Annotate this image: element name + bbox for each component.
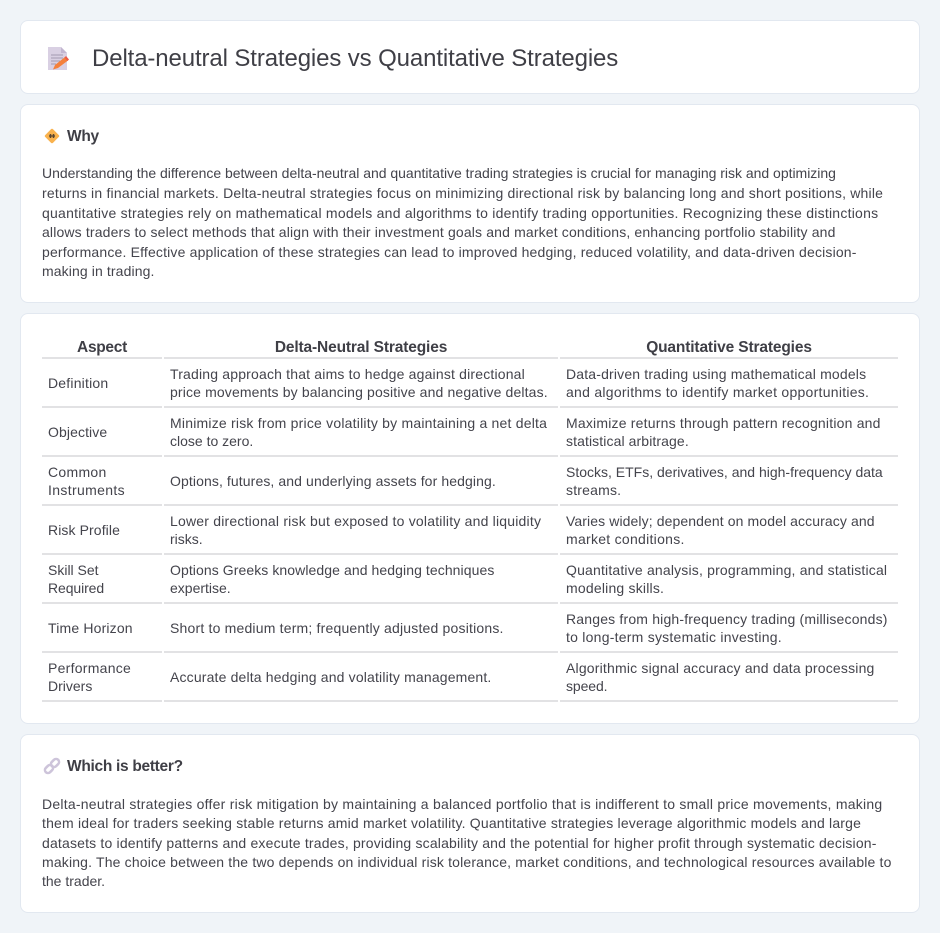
why paragraph: returns in financial markets. Delta-neutral strategies focus on minimizing directional risk by balancing long and short positions, while [42,185,883,201]
table header: Quantitative Strategies [646,339,812,356]
row: skill set required: expertise. [170,580,231,596]
row: objective: close to zero. [170,433,253,449]
row: performance drivers: Algorithmic signal accuracy and data processing [566,660,875,676]
row: risk profile: market conditions. [566,531,685,547]
row: objective [48,415,881,449]
row: common instruments: Stocks, ETFs, derivatives, and high-frequency data [566,464,883,480]
heading: why: Why [67,128,99,145]
row: definition: price movements by balancing positive and negative deltas. [170,384,548,400]
conclusion paragraph: datasets to identify patterns and execute trades, providing scalability and the potential for higher profit through systematic decision- [42,835,877,851]
row: common instruments: Options, futures, and underlying assets for hedging. [170,473,496,489]
row: risk profile: Varies widely; dependent on model accuracy and [566,513,875,529]
row: time horizon [48,611,888,645]
row: risk profile: Lower directional risk but exposed to volatility and liquidity [170,513,541,529]
row: objective: Objective [48,424,107,440]
row: time horizon: Time Horizon [48,620,133,636]
row: performance drivers: Accurate delta hedging and volatility management. [170,669,491,685]
row: skill set required [48,562,887,596]
conclusion paragraph: Delta-neutral strategies offer risk mitigation by maintaining a balanced portfolio that is indifferent to small price movements, making [42,796,882,812]
panel: which is better [20,734,920,913]
why paragraph [42,165,883,279]
icon: memo with pencil [48,47,69,70]
why paragraph: making in trading. [42,263,154,279]
row: skill set required: Options Greeks knowledge and hedging techniques [170,562,494,578]
heading: which is better: Which is better? [67,758,183,775]
icon: warning diamond [44,128,60,144]
row: common instruments [48,464,883,498]
row: time horizon: Short to medium term; frequently adjusted positions. [170,620,504,636]
panel: comparison table [20,313,920,724]
table header: Aspect [77,339,127,356]
row: performance drivers: Performance [48,660,131,676]
row: skill set required: Skill Set [48,562,99,578]
row: definition: Trading approach that aims to hedge against directional [170,366,525,382]
row: definition: Definition [48,375,108,391]
row: common instruments: Common [48,464,107,480]
row: performance drivers: Drivers [48,678,92,694]
header panel [20,20,920,94]
conclusion paragraph: them ideal for traders seeking stable returns amid market volatility. Quantitative strategies leverage algorithmic models and large [42,815,861,831]
row: definition [48,366,869,400]
row: objective: Minimize risk from price volatility by maintaining a net delta [170,415,547,431]
row: performance drivers [48,660,875,694]
row: skill set required: modeling skills. [566,580,664,596]
row: objective: statistical arbitrage. [566,433,689,449]
row: definition: Data-driven trading using mathematical models [566,366,866,382]
table header [77,339,812,356]
why paragraph: Understanding the difference between delta-neutral and quantitative trading strategies is crucial for managing risk and optimizing [42,165,836,181]
panel: why [20,104,920,303]
title: Delta-neutral Strategies vs Quantitative Strategies [92,45,618,72]
table header: Delta-Neutral Strategies [275,339,447,356]
row: time horizon: Ranges from high-frequency trading (milliseconds) [566,611,888,627]
row: skill set required: Quantitative analysis, programming, and statistical [566,562,887,578]
row: risk profile: Risk Profile [48,522,120,538]
row: common instruments: Instruments [48,482,125,498]
why paragraph: quantitative strategies rely on mathematical models and algorithms to identify trading opportunities. Recognizing these distinctions [42,205,878,221]
row: common instruments: streams. [566,482,621,498]
why paragraph: performance. Effective application of these strategies can lead to improved hedging, reduced volatility, and data-driven decision- [42,244,857,260]
row: definition: and algorithms to identify market opportunities. [566,384,869,400]
why paragraph: allows traders to select methods that align with their investment goals and market conditions, enhancing portfolio stability and [42,224,836,240]
row: risk profile: risks. [170,531,203,547]
row: performance drivers: speed. [566,678,607,694]
row: skill set required: Required [48,580,104,596]
conclusion paragraph: making. The choice between the two depends on individual risk tolerance, market conditions, and technological resources available to [42,854,892,870]
row: time horizon: to long-term systematic investing. [566,629,782,645]
icon: chain link [44,758,60,774]
row: risk profile [48,513,875,547]
conclusion paragraph [42,796,892,889]
row: objective: Maximize returns through pattern recognition and [566,415,881,431]
conclusion paragraph: the trader. [42,873,105,889]
